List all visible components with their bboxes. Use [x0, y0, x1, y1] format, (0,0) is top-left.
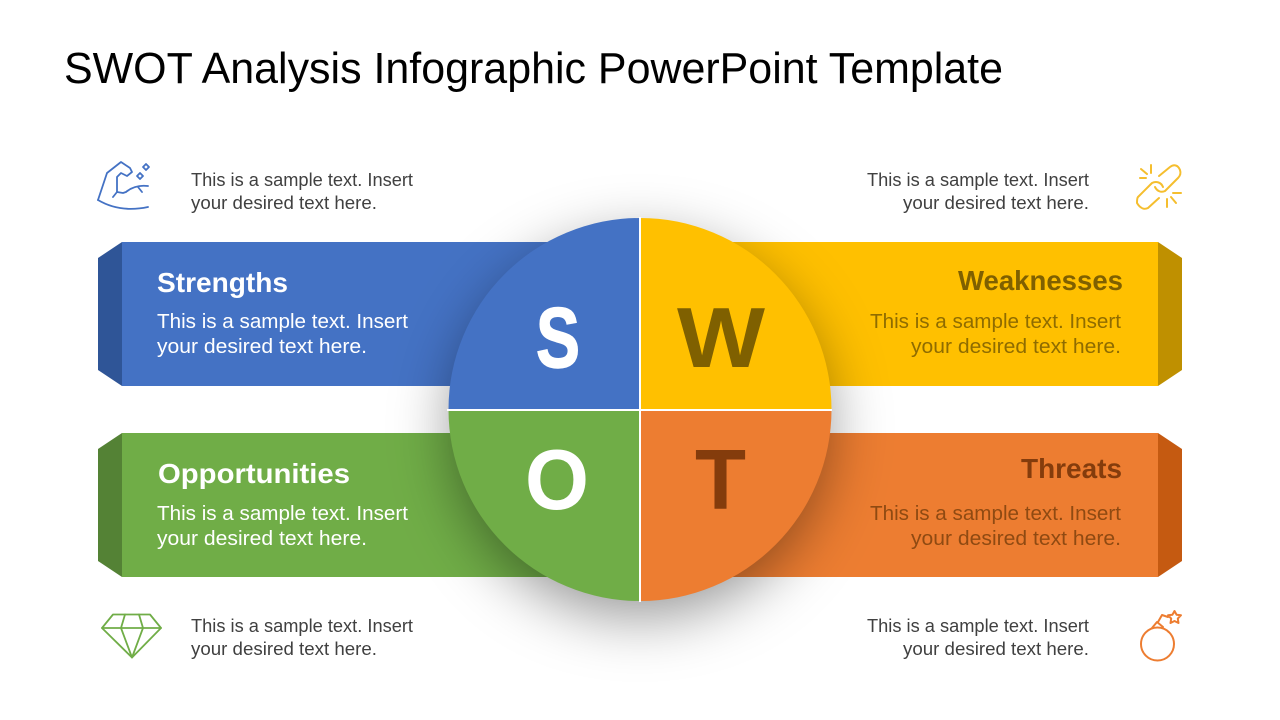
- circle shadow: [452, 240, 828, 616]
- opportunities text: [157, 503, 408, 550]
- note: threats: your desired text here.: [903, 639, 1089, 659]
- letter S: S: [536, 291, 580, 386]
- icon: diamond: [102, 614, 161, 658]
- icon: flexed arm: [98, 162, 149, 209]
- quadrant S: [448, 218, 640, 410]
- letter T: T: [695, 433, 746, 528]
- note: weaknesses: [867, 170, 1089, 213]
- threats text: [870, 503, 1121, 550]
- icon: broken chain link: [1137, 165, 1181, 209]
- icon: bomb: [1141, 611, 1181, 660]
- note: strengths: This is a sample text. Insert: [191, 170, 413, 190]
- strengths text: [157, 311, 408, 358]
- weaknesses heading: Weaknesses: [958, 265, 1123, 296]
- opportunities text: your desired text here.: [157, 528, 367, 550]
- quadrant T: [640, 410, 832, 601]
- threats text: your desired text here.: [911, 528, 1121, 550]
- threats heading: Threats: [1021, 453, 1122, 484]
- strengths text: your desired text here.: [157, 336, 367, 358]
- quadrant W: [640, 218, 832, 410]
- note: threats: This is a sample text. Insert: [867, 616, 1089, 636]
- note: threats: [867, 616, 1089, 659]
- note: opportunities: [191, 616, 413, 659]
- opportunities text: This is a sample text. Insert: [157, 503, 408, 525]
- weaknesses text: your desired text here.: [911, 336, 1121, 358]
- threats text: This is a sample text. Insert: [870, 503, 1121, 525]
- panel: opportunities band: [98, 433, 562, 577]
- weaknesses text: This is a sample text. Insert: [870, 311, 1121, 333]
- weaknesses text: [870, 311, 1121, 358]
- letter W: W: [677, 291, 766, 386]
- note: opportunities: your desired text here.: [191, 639, 377, 659]
- quadrant O: [448, 410, 640, 601]
- note: weaknesses: This is a sample text. Insert: [867, 170, 1089, 190]
- note: strengths: [191, 170, 413, 213]
- strengths text: This is a sample text. Insert: [157, 311, 408, 333]
- strengths heading: Strengths: [157, 267, 288, 298]
- opportunities heading: Opportunities: [158, 458, 350, 489]
- note: strengths: your desired text here.: [191, 193, 377, 213]
- panel: weaknesses band: [718, 242, 1182, 386]
- note: opportunities: This is a sample text. Insert: [191, 616, 413, 636]
- panel: threats band: [718, 433, 1182, 577]
- panel: strengths band: [98, 242, 562, 386]
- title: SWOT Analysis Infographic PowerPoint Template: [64, 44, 1003, 93]
- letter O: O: [525, 433, 589, 528]
- note: weaknesses: your desired text here.: [903, 193, 1089, 213]
- SWOT circle: [447, 217, 832, 602]
